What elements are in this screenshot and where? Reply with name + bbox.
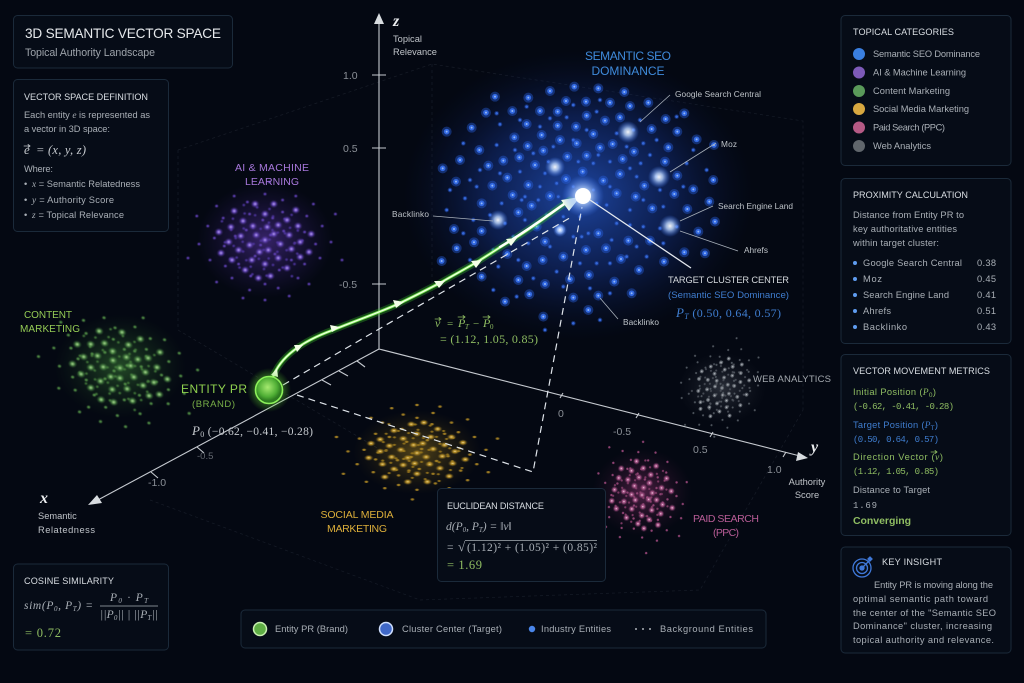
label: Paid Search: PAID SEARCH xyxy=(693,513,759,525)
axis z label: z xyxy=(392,13,400,30)
label: vector equation: = (1.12, 1.05, 0.85) xyxy=(440,332,538,346)
legend bar xyxy=(241,610,766,648)
panel: cosine similarity: || xyxy=(151,609,158,621)
panel: vector space definition: Each entity e is represented as xyxy=(24,110,150,121)
label: vector equation: P xyxy=(482,316,491,330)
panel: vector space definition xyxy=(14,80,168,232)
panel: cosine similarity: sim(P xyxy=(24,600,53,612)
panel: key insight: the center of the "Semantic SEO xyxy=(853,608,996,618)
label: vector equation xyxy=(435,316,538,346)
label: Social Media Marketing xyxy=(320,509,394,535)
axis z label: Topical xyxy=(393,34,422,44)
panel: vector space definition: VECTOR SPACE DEFINITION xyxy=(24,92,148,102)
title: 3D SEMANTIC VECTOR SPACE xyxy=(25,26,221,41)
axis tick labels: 0 xyxy=(558,408,564,420)
panel: topical categories: Social Media Marketing xyxy=(873,104,969,114)
panel: euclidean distance: , P xyxy=(466,521,479,533)
panel: title xyxy=(14,16,232,68)
panel: euclidean distance: T xyxy=(479,526,484,534)
cluster: Content Marketing xyxy=(25,289,215,449)
formula: entity vector: = (x, y, z) xyxy=(36,143,86,157)
panel: cosine similarity: , P xyxy=(58,600,72,612)
axis tick labels: -1.0 xyxy=(148,477,166,489)
label: vector equation: 0 xyxy=(490,323,494,331)
entity labels: Backlinko xyxy=(392,209,429,219)
cluster: Web Analytics xyxy=(661,324,781,451)
entity labels: Ahrefs xyxy=(744,245,768,255)
axes xyxy=(88,13,808,505)
panel: proximity calculation: 0.38 xyxy=(977,258,996,268)
panel: cosine similarity: COSINE SIMILARITY xyxy=(24,576,114,586)
axis tick labels: 1.0 xyxy=(343,70,358,82)
label: Entity PR xyxy=(181,382,313,439)
background grid box xyxy=(150,64,803,600)
panel: cosine similarity: ||P xyxy=(100,609,114,621)
panel: euclidean distance: = xyxy=(447,542,454,554)
label: Target Cluster Center xyxy=(668,275,789,321)
label: vector equation: − xyxy=(473,318,479,330)
axis tick labels: 1.0 xyxy=(767,464,782,476)
label: AI & Machine Learning: AI & MACHINE xyxy=(235,162,309,174)
entity labels: Moz xyxy=(721,139,737,149)
label: Target Cluster Center: T xyxy=(684,312,689,321)
panel: proximity calculation: 0.43 xyxy=(977,322,996,332)
axis z label xyxy=(392,13,437,57)
panel: key insight: KEY INSIGHT xyxy=(882,557,942,567)
legend: entity PR xyxy=(254,622,348,636)
panel: vector movement metrics: 0 xyxy=(929,392,933,399)
panel: proximity calculation: 0.41 xyxy=(977,290,996,300)
panel: proximity calculation: Google Search Central xyxy=(863,258,962,268)
green vector path xyxy=(271,197,580,377)
panel: euclidean distance: d(P xyxy=(446,521,463,533)
axis tick labels: -0.5 xyxy=(339,279,357,291)
label: vector equation: P xyxy=(457,316,466,330)
legend: background entities: Background Entities xyxy=(660,624,753,634)
axis z label: Relevance xyxy=(393,47,437,57)
panel: euclidean distance xyxy=(438,488,606,582)
panel: topical categories: Content Marketing xyxy=(873,86,950,96)
cluster: Paid Search xyxy=(578,427,705,564)
panel: cosine similarity: · P xyxy=(123,592,143,604)
entity labels xyxy=(392,89,793,327)
panel: vector space definition: • xyxy=(24,179,27,189)
panel: key insight xyxy=(841,547,1011,653)
axis y label: y xyxy=(809,439,819,456)
panel: proximity calculation: PROXIMITY CALCULATION xyxy=(853,190,968,200)
axis x label xyxy=(38,490,95,535)
panel: proximity calculation: Search Engine Land xyxy=(863,290,949,300)
label: AI & Machine Learning xyxy=(235,162,309,188)
legend: cluster center xyxy=(380,622,502,636)
panel: vector space definition: x = Semantic Relatedness xyxy=(31,179,140,190)
panel: cosine similarity: 0 xyxy=(118,597,122,605)
label: vector equation: = xyxy=(447,318,453,330)
panel: title: Topical Authority Landscape xyxy=(25,47,155,59)
label: Content Marketing: MARKETING xyxy=(20,324,80,335)
axis tick labels: 0.5 xyxy=(693,444,708,456)
panel: vector movement metrics: 1.69 xyxy=(853,501,877,511)
label: Target Cluster Center: TARGET CLUSTER CENTER xyxy=(668,275,789,285)
panel: key insight: Entity PR is moving along the xyxy=(874,580,993,590)
label: Content Marketing: CONTENT xyxy=(24,310,72,321)
label: Content Marketing xyxy=(20,310,80,335)
legend: cluster center: Cluster Center (Target) xyxy=(402,624,502,634)
panel: vector space definition: z = Topical Relevance xyxy=(31,210,124,221)
panel: cosine similarity: 0 xyxy=(114,614,118,622)
panel: vector movement metrics xyxy=(841,354,1011,536)
entity labels: Backlinko xyxy=(623,317,659,327)
panel: euclidean distance: = 1.69 xyxy=(447,558,482,572)
panel: cosine similarity: = 0.72 xyxy=(25,626,61,640)
panel: vector movement metrics: Distance to Target xyxy=(853,485,930,495)
entity labels: Search Engine Land xyxy=(718,201,793,211)
panel: proximity calculation: Backlinko xyxy=(863,322,907,332)
panel: euclidean distance: EUCLIDEAN DISTANCE xyxy=(447,501,544,511)
panel: key insight: optimal semantic path toward xyxy=(853,594,988,604)
cluster: Social Media Marketing xyxy=(336,405,498,499)
axis x label: Semantic xyxy=(38,511,77,521)
panel: topical categories: AI & Machine Learning xyxy=(873,68,966,78)
axis tick labels: -0.5 xyxy=(197,451,213,462)
label: Entity PR: P xyxy=(191,423,200,438)
panel: proximity calculation: Distance from Entity PR to xyxy=(853,210,964,220)
panel: cosine similarity: T xyxy=(147,614,152,622)
entity PR ball xyxy=(247,368,291,412)
panel: key insight: topical authority and relevance. xyxy=(853,635,994,645)
panel: vector space definition: a vector in 3D space: xyxy=(24,124,110,134)
axis y label: Score xyxy=(795,490,819,500)
panel: cosine similarity: ) = xyxy=(76,600,93,612)
panel: euclidean distance: 0 xyxy=(463,526,467,534)
panel: key insight: Dominance" cluster, increasing xyxy=(853,621,992,631)
label: Semantic SEO Dominance: SEMANTIC SEO xyxy=(585,49,671,63)
panel: vector movement metrics: ) xyxy=(935,420,938,430)
panel: vector movement metrics: (-0.62, -0.41, -0.28) xyxy=(853,402,954,412)
cluster: Semantic SEO Dominance xyxy=(403,50,753,340)
cluster: AI & Machine Learning xyxy=(188,182,342,300)
legend: industry entities: Industry Entities xyxy=(541,624,611,634)
panel: cosine similarity: 0 xyxy=(54,605,58,613)
panel: proximity calculation: 0.51 xyxy=(977,306,996,316)
label: vector equation: v xyxy=(435,316,441,330)
panel: cosine similarity: P xyxy=(110,592,117,604)
label: Entity PR: (−0.62, −0.41, −0.28) xyxy=(205,426,313,438)
panel: cosine similarity: T xyxy=(144,597,149,605)
panel: proximity calculation: Moz xyxy=(863,274,882,284)
panel: topical categories xyxy=(841,16,1011,166)
panel: euclidean distance: (1.12)² + (1.05)² + (0.85)² xyxy=(467,542,598,554)
icon: target with arrow xyxy=(853,557,872,577)
panel: topical categories: Web Analytics xyxy=(873,141,931,151)
panel: cosine similarity: || | ||P xyxy=(118,609,147,621)
panel: vector movement metrics: Direction Vector (v) xyxy=(853,452,943,463)
panel: cosine similarity: T xyxy=(73,605,78,613)
panel: vector movement metrics: Converging xyxy=(853,515,911,527)
axis tick labels: -0.5 xyxy=(613,426,631,438)
axis y label: Authority xyxy=(789,477,826,487)
label: Social Media Marketing: SOCIAL MEDIA xyxy=(320,509,394,521)
panel: proximity calculation: 0.45 xyxy=(977,274,996,284)
panel: vector movement metrics: (1.12, 1.05, 0.85) xyxy=(853,467,939,477)
axis tick labels xyxy=(148,70,782,489)
leader lines xyxy=(433,95,738,319)
panel: proximity calculation: Ahrefs xyxy=(863,306,891,316)
axis tick labels: 0.5 xyxy=(343,143,358,155)
label: Target Cluster Center: (Semantic SEO Dominance) xyxy=(668,290,789,301)
panel: vector space definition: y = Authority Score xyxy=(31,195,114,206)
panel: vector movement metrics: VECTOR MOVEMENT METRICS xyxy=(853,366,990,376)
panel: euclidean distance: ) = ‖v‖ xyxy=(482,521,512,533)
label: Paid Search: (PPC) xyxy=(713,527,739,539)
label: Target Cluster Center: P xyxy=(675,305,684,320)
panel: topical categories: TOPICAL CATEGORIES xyxy=(853,27,954,37)
label: Web Analytics: WEB ANALYTICS xyxy=(753,374,831,385)
panel: vector space definition: • xyxy=(24,210,27,220)
label: Semantic SEO Dominance: DOMINANCE xyxy=(592,64,664,78)
panel: vector movement metrics: Target Position (P xyxy=(853,420,930,431)
panel: vector movement metrics: Initial Position (P xyxy=(853,387,929,398)
entity labels: Google Search Central xyxy=(675,89,761,99)
dashed projection lines xyxy=(283,207,582,472)
label: AI & Machine Learning: LEARNING xyxy=(245,176,299,188)
panel: topical categories: Semantic SEO Dominance xyxy=(873,49,980,59)
target cluster center xyxy=(562,175,604,217)
panel: topical categories: Paid Search (PPC) xyxy=(873,122,945,132)
panel: cosine similarity xyxy=(14,564,168,650)
panel: vector space definition: Where: xyxy=(24,164,53,174)
panel: proximity calculation: within target cluster: xyxy=(852,238,939,248)
axis x label: Relatedness xyxy=(38,525,95,535)
panel: proximity calculation: key authoritative entities xyxy=(853,224,957,234)
formula: entity vector: e xyxy=(24,142,30,157)
label: Target Cluster Center: (0.50, 0.64, 0.57) xyxy=(689,306,781,320)
label: Semantic SEO Dominance xyxy=(585,49,671,78)
axis y label xyxy=(789,439,826,500)
panel: euclidean distance: √ xyxy=(458,539,466,554)
label: Entity PR: ENTITY PR xyxy=(181,382,247,396)
label: Social Media Marketing: MARKETING xyxy=(327,523,387,535)
label: Entity PR: (BRAND) xyxy=(192,399,235,410)
panel: vector movement metrics: (0.50, 0.64, 0.57) xyxy=(853,435,939,445)
label: Paid Search xyxy=(693,513,759,539)
label: vector equation: T xyxy=(465,323,470,331)
label: Entity PR: 0 xyxy=(200,430,204,439)
panel: vector movement metrics: T xyxy=(931,425,935,432)
legend: entity PR: Entity PR (Brand) xyxy=(275,624,348,634)
axis x label: x xyxy=(39,490,48,507)
panel: vector space definition: • xyxy=(24,195,27,205)
panel: vector movement metrics: ) xyxy=(933,387,936,397)
panel: proximity calculation xyxy=(841,178,1011,344)
